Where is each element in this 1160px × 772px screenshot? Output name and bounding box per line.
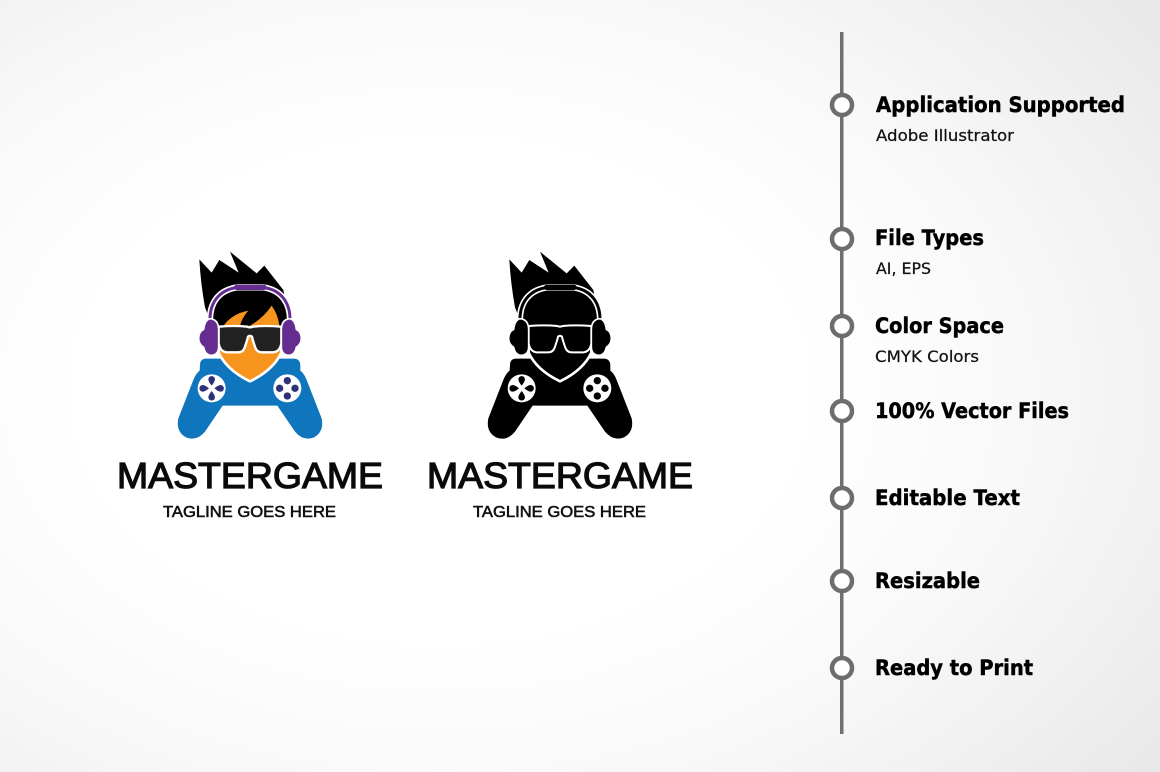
node: application supported [832,93,1125,145]
sunglasses [219,326,281,352]
face [219,326,281,381]
controller [178,359,322,439]
right ear cup [591,319,611,355]
left ear cup [199,319,219,355]
tagline: TAGLINE GOES HERE [163,504,336,521]
node: application supported: Application Supported [876,93,1125,117]
hair spikes [199,252,289,320]
hair spikes [509,252,599,320]
node: color space [832,314,1004,366]
node: file types: File Types [875,226,984,250]
controller [488,359,632,439]
node: file types: AI, EPS [876,259,931,278]
sunglasses [529,325,591,352]
colour logo [117,252,383,521]
right controller pad [273,374,301,402]
node: resizable [832,569,980,593]
brand name: MASTERGAME [427,455,693,496]
node: application supported: Adobe Illustrator [876,126,1014,145]
hair fringe highlights [223,306,279,326]
colour logo icon: gamer with headset and controller [178,252,322,439]
timeline of features [832,32,1125,734]
node: resizable: Resizable [875,569,980,593]
headset band [520,287,600,322]
left ear cup [509,319,529,355]
node: color space: Color Space [875,314,1004,338]
hair on head [523,290,597,326]
headset band [210,287,290,322]
node: ready to print: Ready to Print [875,656,1033,680]
hair on head [213,290,287,326]
node: color space: CMYK Colors [875,347,979,366]
node: file types [832,226,984,278]
vertical line [840,32,844,734]
tagline: TAGLINE GOES HERE [473,504,646,521]
left controller pad [508,374,536,402]
right controller pad [583,374,611,402]
node: vector files: 100% Vector Files [875,399,1069,423]
left controller pad [198,374,226,402]
face [529,326,591,381]
right ear cup [281,319,301,355]
monochrome logo [427,252,693,521]
black logo icon: gamer with headset and controller [488,252,632,439]
node: editable text: Editable Text [875,486,1020,510]
brand name: MASTERGAME [117,455,383,496]
